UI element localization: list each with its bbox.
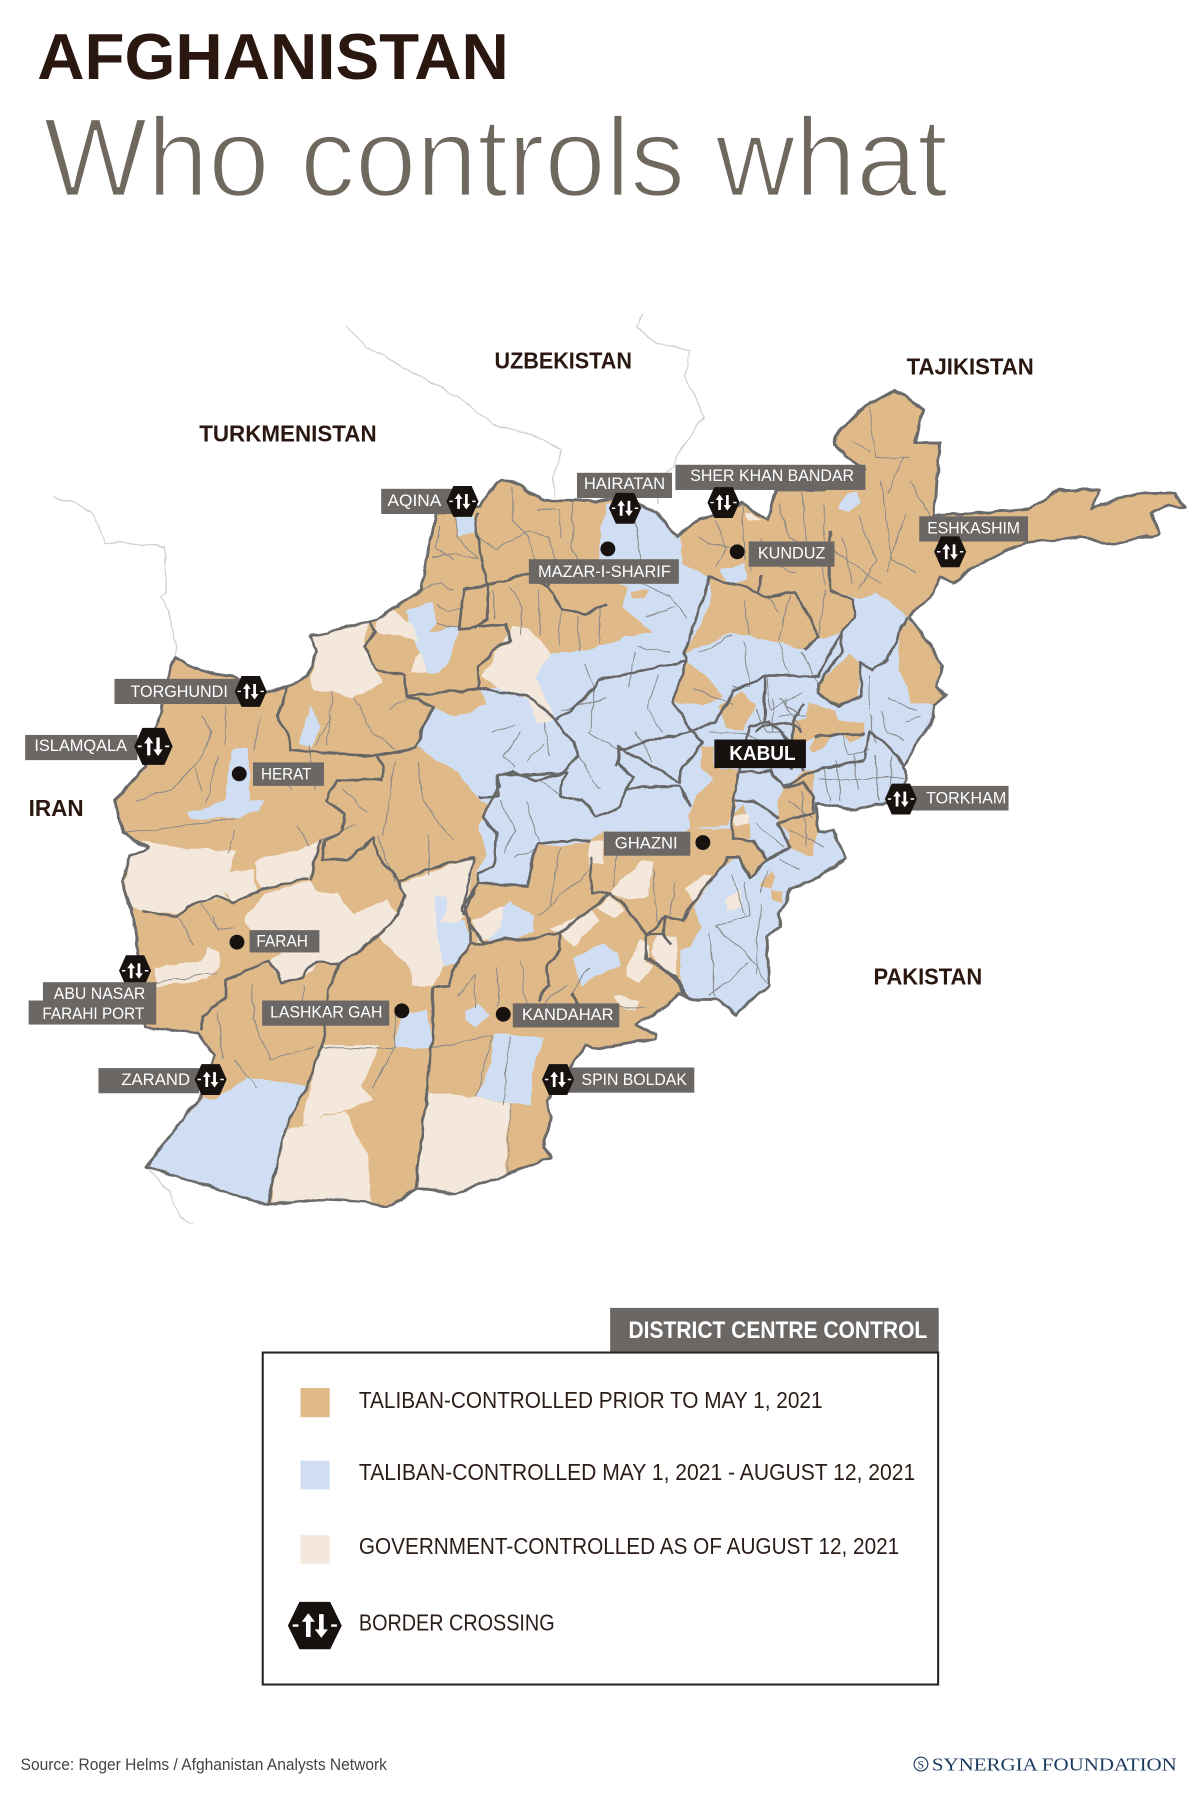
border crossing: Sher Khan Bandar [675, 465, 865, 518]
city: Herat: HERAT [261, 765, 311, 784]
border crossing: Hairatan [577, 473, 672, 524]
border crossing: Eshkashim: ESHKASHIM [927, 518, 1020, 537]
province boundaries [143, 513, 907, 1205]
city: Kunduz [730, 541, 835, 567]
country label: Turkmenistan: TURKMENISTAN [199, 420, 377, 446]
country label: Iran: IRAN [29, 795, 84, 821]
region: central and eastern Taliban-controlled since May 2021 [417, 504, 973, 1030]
country label: Pakistan: PAKISTAN [873, 964, 982, 990]
border crossing: Torghundi [114, 676, 267, 707]
city: Lashkar Gah: LASHKAR GAH [270, 1003, 382, 1022]
city: Farah [230, 930, 319, 952]
border crossing: Islamqala: ISLAMQALA [34, 736, 128, 755]
legend box [263, 1353, 938, 1685]
border crossing: Torkham [885, 784, 1009, 815]
government-controlled districts [125, 512, 761, 1205]
legend item: border crossing [288, 1602, 555, 1649]
city: Kandahar [496, 1003, 619, 1027]
blue strip over Uruzgan [435, 895, 470, 967]
map of Afghanistan [103, 378, 1202, 1225]
legend header: DISTRICT CENTRE CONTROL [628, 1317, 927, 1344]
legend [263, 1308, 939, 1685]
border crossing: Hairatan: HAIRATAN [584, 474, 665, 493]
country label: Tajikistan: TAJIKISTAN [907, 353, 1034, 379]
city: Kabul [714, 740, 806, 768]
tan overlays inside the blue zone [631, 577, 946, 903]
city: Lashkar Gah [262, 1001, 409, 1026]
country outline [114, 390, 1185, 1207]
border crossing: Spin Boldak: SPIN BOLDAK [582, 1070, 687, 1089]
legend header [610, 1308, 939, 1353]
legend item: Taliban prior to May 1: TALIBAN-CONTROLLED PRIOR TO MAY 1, 2021 [359, 1387, 823, 1413]
logo: Synergia Foundation: SYNERGIA FOUNDATION [932, 1754, 1177, 1774]
legend item: border crossing: BORDER CROSSING [359, 1610, 555, 1636]
border crossing: Abu Nasar Farahi Port: FARAHI PORT [42, 1004, 144, 1023]
border crossing: Aqina [381, 486, 479, 517]
map fills [103, 378, 1202, 1225]
district boundaries [122, 406, 933, 1179]
city: Herat [232, 762, 324, 786]
border crossing: Eshkashim [919, 516, 1028, 567]
city: Kandahar: KANDAHAR [522, 1005, 614, 1024]
neighbouring country borders [55, 315, 704, 1224]
city: Mazar-i-Sharif [529, 541, 679, 584]
other blue districts [144, 491, 861, 1205]
city: Farah: FARAH [256, 932, 308, 951]
title: AFGHANISTAN [37, 20, 509, 93]
city: Kabul: KABUL [729, 742, 796, 765]
city: Ghazni [604, 832, 710, 856]
city: Mazar-i-Sharif: MAZAR-I-SHARIF [538, 562, 671, 581]
border crossing: Islamqala [25, 728, 173, 765]
border crossing: Zarand: ZARAND [121, 1070, 190, 1089]
legend item: Taliban May to August: TALIBAN-CONTROLLED MAY 1, 2021 - AUGUST 12, 2021 [359, 1459, 915, 1485]
border crossing: Spin Boldak [542, 1064, 694, 1095]
border crossing: Abu Nasar Farahi Port: ABU NASAR [54, 984, 145, 1003]
city: Ghazni: GHAZNI [615, 833, 678, 852]
subtitle: Who controls what [44, 94, 948, 220]
country label: Uzbekistan: UZBEKISTAN [495, 348, 632, 374]
city: Kunduz: KUNDUZ [758, 544, 825, 563]
border crossing: Zarand [98, 1064, 227, 1095]
border crossing: Sher Khan Bandar: SHER KHAN BANDAR [690, 466, 854, 485]
border crossing: Aqina: AQINA [388, 491, 442, 510]
logo: Synergia Foundation: S [918, 1758, 924, 1772]
source note: Source: Roger Helms / Afghanistan Analysts Network [21, 1755, 388, 1774]
border crossing: Torghundi: TORGHUNDI [131, 682, 228, 701]
legend item: Government controlled: GOVERNMENT-CONTROLLED AS OF AUGUST 12, 2021 [359, 1533, 899, 1559]
border crossing: Abu Nasar Farahi Port [29, 955, 156, 1025]
border crossing: Torkham: TORKHAM [926, 789, 1006, 808]
